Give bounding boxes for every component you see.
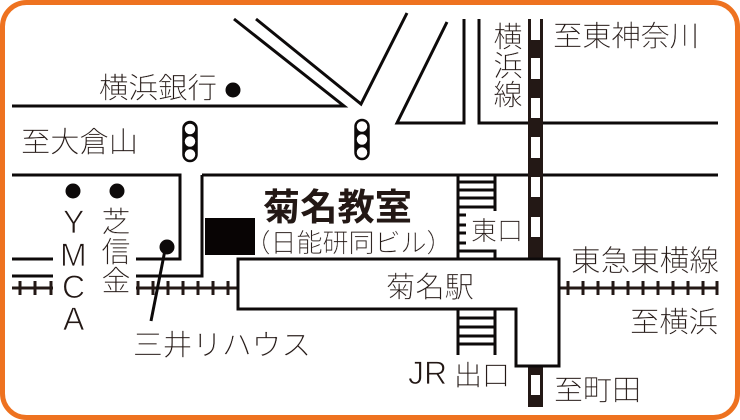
station building — [238, 259, 559, 366]
railway: Toyoko line east — [559, 281, 718, 295]
marker: Shiba Shinkin — [110, 184, 124, 198]
marker: Mitsui Rehouse with leader — [151, 240, 174, 321]
label: Yokohama line — [493, 21, 523, 112]
label: Yokohama line: 線 — [493, 79, 523, 112]
east exit crossing — [458, 175, 495, 259]
label: YMCA: C — [62, 269, 85, 305]
title: 菊名教室 — [263, 187, 412, 228]
label: Shiba Shinkin: 芝 — [101, 207, 131, 239]
label: Mitsui Rehouse: 三井リハウス — [133, 330, 311, 362]
label: YMCA: M — [60, 237, 87, 273]
label: to Yokohama: 至横浜 — [630, 306, 718, 339]
label: YMCA: A — [63, 301, 85, 337]
school building — [205, 218, 255, 255]
label: YMCA: Y — [63, 204, 84, 240]
label: Yokohama Bank: 横浜銀行 — [99, 72, 217, 105]
label: Shiba Shinkin — [101, 207, 131, 298]
railway: Toyoko line west — [12, 281, 238, 295]
label: Yokohama line: 横 — [493, 21, 523, 54]
marker: Yokohama Bank — [226, 82, 240, 98]
label: JR exit: JR — [408, 355, 447, 391]
subtitle: （日能研同ビル） — [244, 228, 453, 258]
roads — [12, 13, 718, 276]
JR exit crossing — [458, 309, 495, 355]
railway: Yokohama line — [528, 19, 543, 407]
traffic signal left — [183, 122, 197, 162]
marker: YMCA — [66, 184, 80, 198]
label: to Higashi-Kanagawa: 至東神奈川 — [553, 20, 699, 53]
label: Shiba Shinkin: 信 — [101, 237, 131, 269]
label: JR exit — [408, 355, 510, 391]
label: to Okurayama: 至大倉山 — [21, 126, 138, 159]
label: JR exit: 出口 — [454, 360, 510, 391]
label: Kikuna station: 菊名駅 — [386, 271, 474, 304]
label: east exit: 東口 — [471, 216, 523, 246]
label: YMCA — [60, 204, 87, 337]
label: Toyoko line: 東急東横線 — [571, 245, 719, 278]
label: Shiba Shinkin: 金 — [101, 266, 131, 298]
label: to Machida: 至町田 — [554, 375, 641, 407]
traffic signal right — [355, 120, 369, 160]
label: Yokohama line: 浜 — [493, 51, 523, 83]
